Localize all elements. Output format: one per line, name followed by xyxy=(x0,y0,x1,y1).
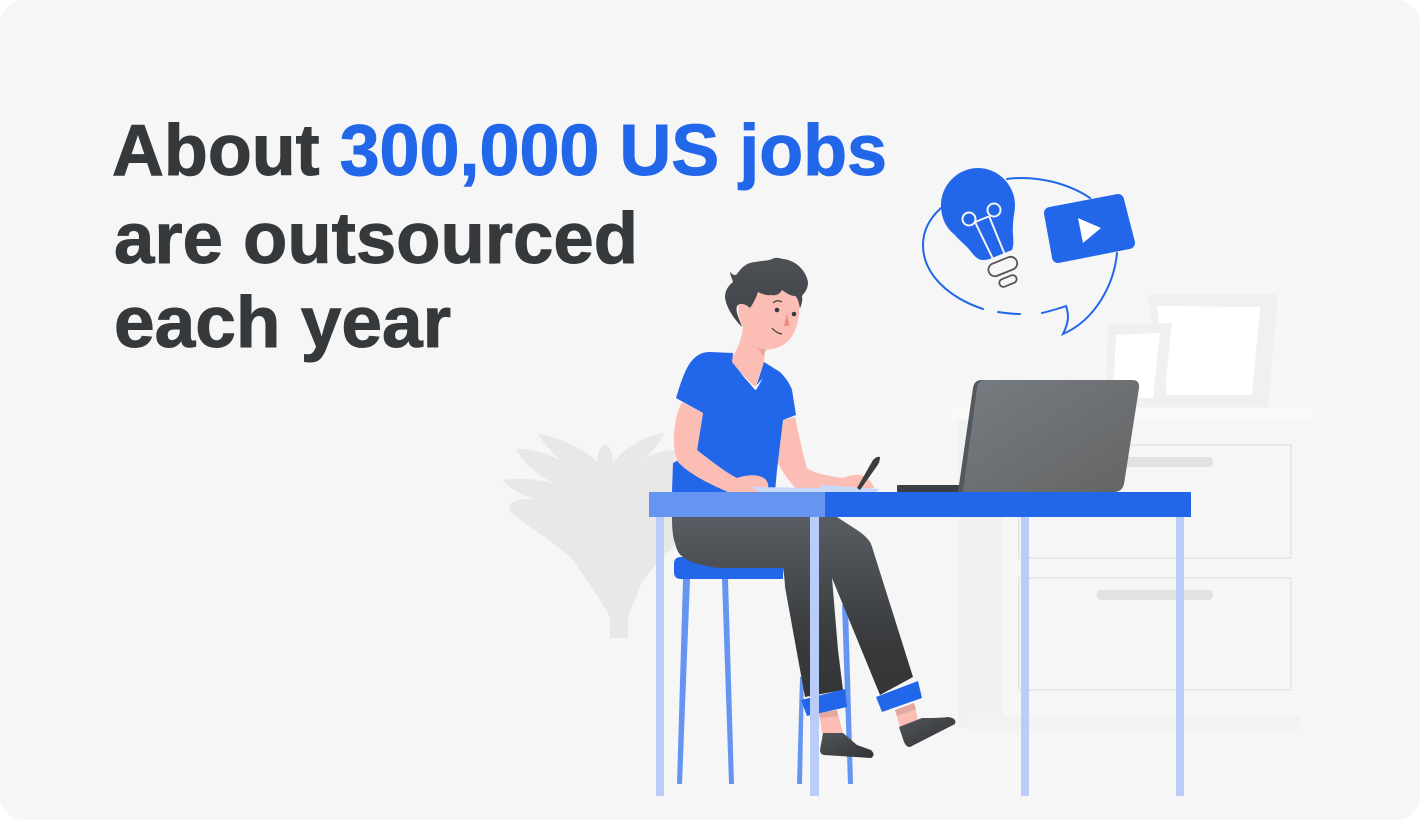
cabinet foot xyxy=(968,716,1300,730)
lower drawer xyxy=(1019,578,1291,690)
collar xyxy=(740,373,763,390)
title: About 300,000 US jobs xyxy=(112,111,887,191)
person xyxy=(672,258,955,758)
neck shadow xyxy=(757,347,767,356)
desk legs xyxy=(656,517,1184,796)
title: are outsourced xyxy=(114,199,638,279)
left arm xyxy=(674,402,768,492)
neck xyxy=(732,325,775,388)
desk xyxy=(649,492,1191,796)
mouth xyxy=(772,328,782,334)
background plant xyxy=(503,433,680,638)
eyebrow xyxy=(773,301,782,303)
right arm xyxy=(778,417,874,490)
picture frame: large xyxy=(1148,293,1278,407)
trousers xyxy=(672,517,913,697)
far trouser cuff xyxy=(876,681,922,712)
pen xyxy=(857,457,880,490)
background cabinet xyxy=(952,293,1312,730)
bubble outline xyxy=(923,178,1117,334)
near shoe xyxy=(820,733,874,758)
upper drawer xyxy=(1019,445,1291,558)
eyes xyxy=(775,308,796,316)
desk top left section xyxy=(649,492,825,517)
picture frame: small xyxy=(1105,323,1172,407)
far leg ankle xyxy=(895,703,918,727)
stool seat xyxy=(674,557,783,579)
speech bubble with ideas xyxy=(923,168,1129,334)
laptop xyxy=(897,380,1139,492)
head xyxy=(738,288,799,350)
title: each year xyxy=(114,283,451,363)
cabinet top xyxy=(952,408,1312,420)
title xyxy=(112,111,887,363)
near leg ankle xyxy=(819,710,843,733)
t-shirt xyxy=(672,352,796,492)
icon: light bulb xyxy=(941,168,1019,288)
near trouser cuff xyxy=(801,689,847,716)
nose xyxy=(784,314,790,326)
stool legs xyxy=(677,579,853,784)
cabinet side xyxy=(958,420,1003,728)
desk top right section xyxy=(825,492,1191,517)
icon: video player xyxy=(1050,200,1129,257)
laptop base xyxy=(897,485,967,492)
laptop lid xyxy=(958,380,1000,492)
stool xyxy=(674,557,853,784)
hair xyxy=(725,258,808,327)
far shoe xyxy=(899,717,955,747)
paper xyxy=(750,485,880,492)
